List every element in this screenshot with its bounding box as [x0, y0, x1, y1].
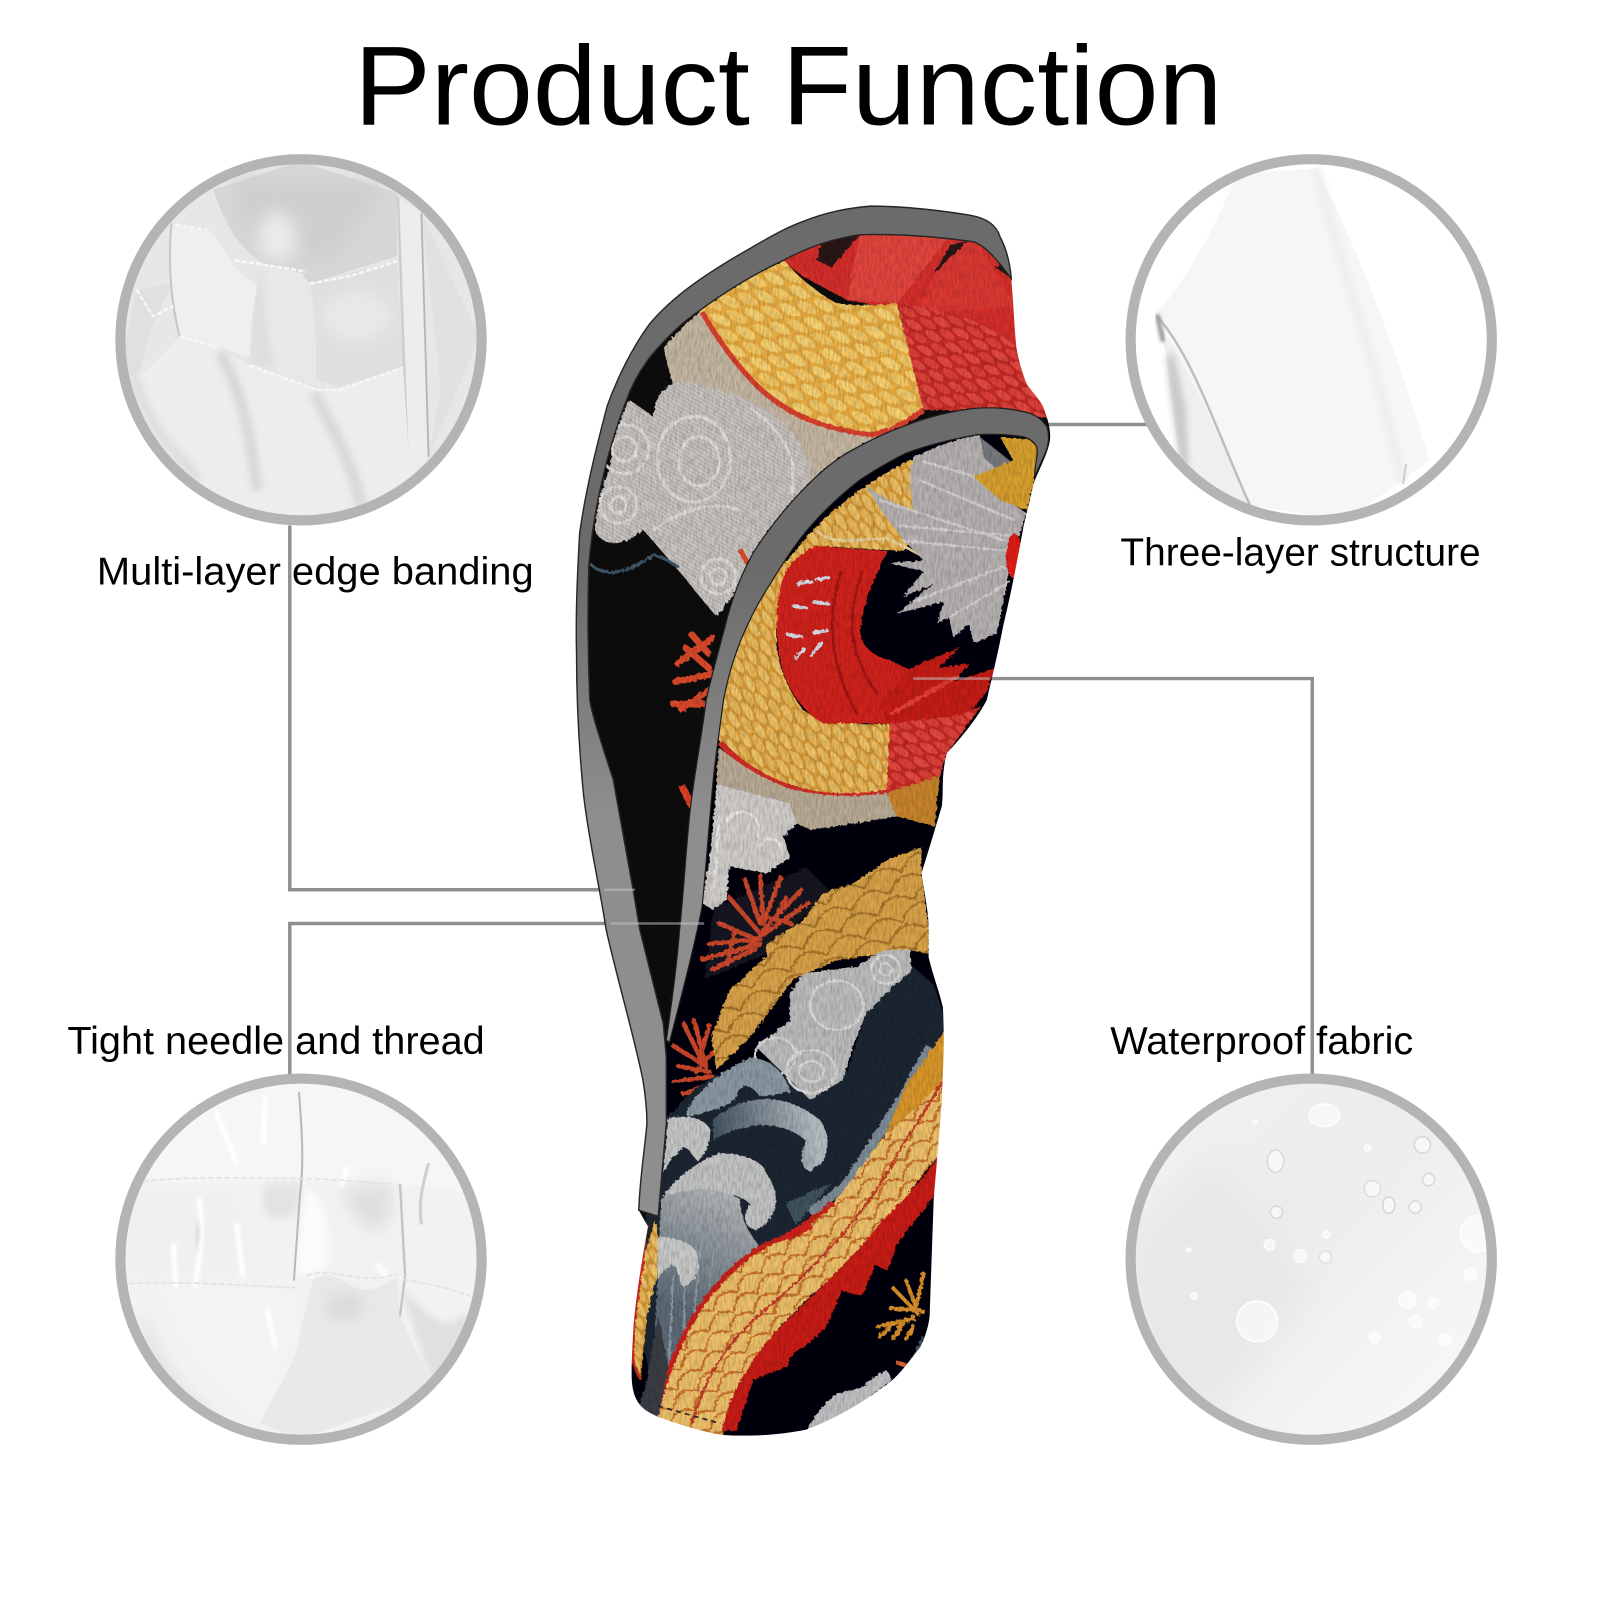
white cloud bottom: [806, 1370, 892, 1432]
gold dragon lower body: [658, 1084, 942, 1435]
base stitching: [658, 1406, 720, 1423]
label: three-layer structure: Three-layer structure: [1120, 531, 1481, 574]
vertical band: [398, 197, 429, 477]
top shaded fold: [213, 161, 397, 284]
connector: tight needle and thread: [290, 923, 610, 1078]
red coral front: [673, 876, 808, 1094]
gold mane: [973, 437, 1039, 510]
detail circle: three-layer structure: [1131, 159, 1492, 520]
product: golf headcover with embroidered dragon: [561, 194, 1071, 1459]
gold clouds: [711, 847, 929, 1070]
lower-right flat panel: [260, 1275, 434, 1439]
stitch lines: [137, 224, 403, 390]
white clouds front: [756, 950, 911, 1100]
red inner body: [777, 546, 918, 723]
orange coral: [878, 1273, 923, 1339]
white mane: [866, 435, 1027, 643]
beige cloud body: [663, 311, 906, 480]
navy patch behind coral: [704, 867, 832, 980]
red flames: [880, 647, 995, 730]
lower cloth: [137, 337, 410, 520]
outer edge binding and strap: [576, 206, 1011, 1216]
edge layer: [1159, 324, 1250, 503]
red scale tail: [887, 706, 982, 791]
bright fold: [296, 1189, 328, 1276]
blue thread line: [590, 555, 679, 572]
centre strip: [250, 263, 316, 380]
low wave: [657, 1237, 699, 1287]
white cloud front upper: [702, 784, 797, 910]
gold dragon scales: [700, 260, 923, 434]
detail circle: tight needle and thread: [120, 1071, 482, 1440]
label: multi-layer edge banding: Multi-layer edge banding: [97, 551, 534, 594]
small wave: [663, 1117, 710, 1173]
lower-left cloth: [128, 1288, 300, 1423]
gold dragon crescent: [718, 460, 914, 794]
infographic canvas: [68, 43, 1497, 1445]
left gold strip: [633, 1220, 658, 1380]
wave 2: [713, 1099, 828, 1171]
stitch lines: [129, 1178, 469, 1296]
upper wave crest: [687, 1057, 791, 1117]
left small panel: [120, 284, 171, 380]
glossy streaks: [173, 1097, 386, 1347]
wave 3: [662, 1152, 777, 1230]
grey hem corner: [638, 1316, 668, 1418]
red fin: [784, 235, 1044, 408]
right patch: [310, 260, 403, 387]
red eye: [1006, 534, 1022, 579]
detail circle: multi-layer edge banding: [120, 159, 482, 520]
detail circle: waterproof fabric: [1131, 1079, 1497, 1440]
wave body: [653, 1189, 760, 1367]
connector: waterproof fabric: [990, 679, 1312, 1078]
flap edge binding: [666, 408, 1049, 1043]
left patch: [171, 223, 257, 357]
label: waterproof fabric: Waterproof fabric: [1110, 1020, 1413, 1063]
back panel embroidery: [588, 235, 1050, 1436]
red feather edge: [722, 1148, 944, 1431]
fibre texture overlay: [571, 204, 1061, 1444]
red coral back: [673, 635, 714, 709]
dark blue waves base: [642, 965, 944, 1366]
label: tight needle and thread: Tight needle and thread: [67, 1020, 485, 1063]
water droplets: [1187, 1104, 1497, 1346]
beige band: [716, 747, 940, 830]
white clouds: [595, 381, 811, 616]
connector: three-layer structure: [1047, 423, 1149, 426]
flap embroidery: [628, 408, 1061, 1449]
connector overlays on product: [604, 679, 990, 923]
fold lines: [294, 1092, 302, 1281]
title: Product Function: [354, 22, 1222, 148]
gold whisker: [814, 530, 919, 556]
upper panel: [122, 1071, 480, 1194]
connector: multi-layer edge banding: [290, 526, 604, 890]
pale cloth panel: [1156, 168, 1430, 520]
